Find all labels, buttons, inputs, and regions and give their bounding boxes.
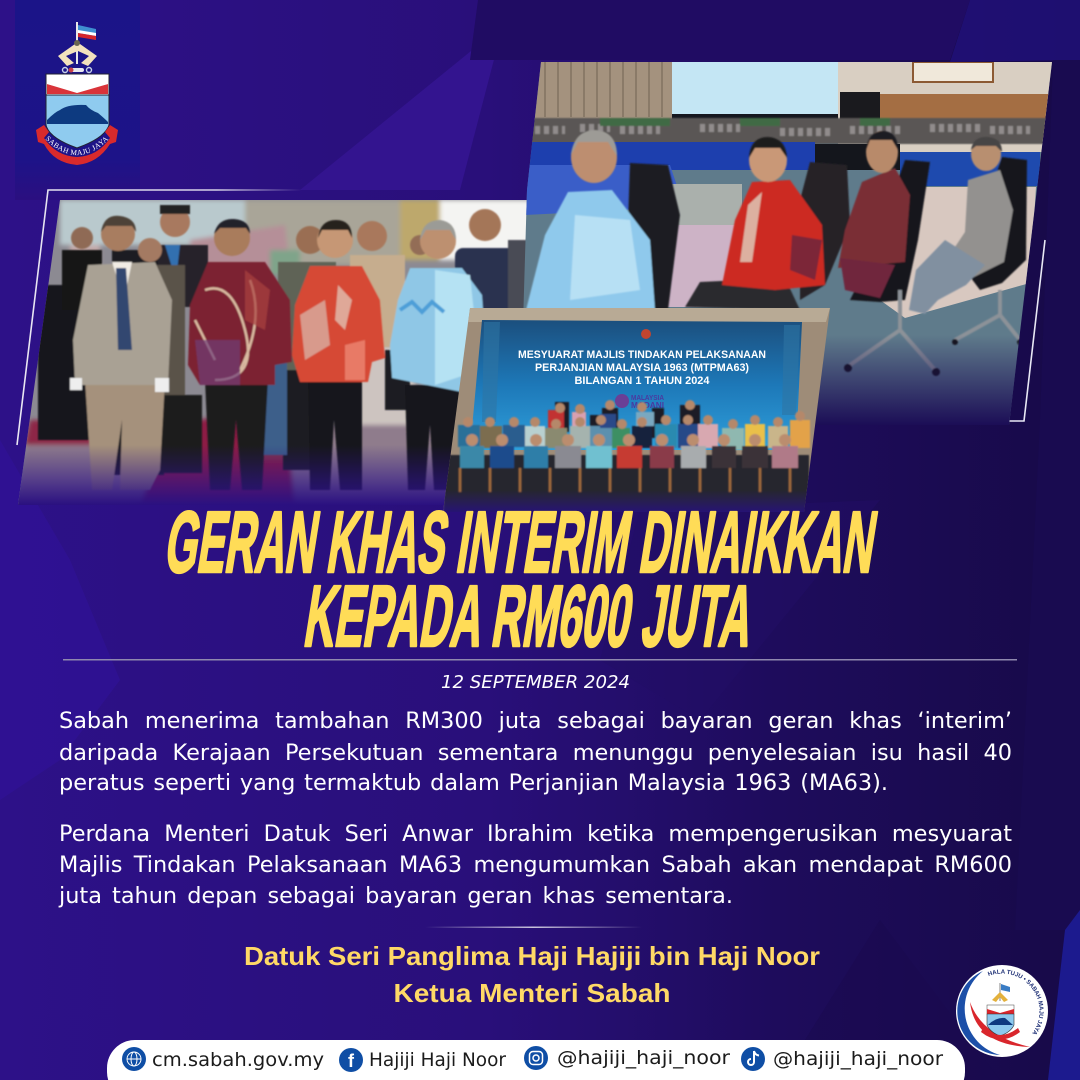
man in grey suit, seated [909,137,1027,314]
instagram: @hajiji_haji_noor [557,1047,730,1069]
banner heading [518,350,766,384]
paragraph 1 [59,708,1012,796]
photo: group photo with banner [440,306,840,516]
paragraph 2: Perdana Menteri Datuk Seri Anwar Ibrahim ketika mempengerusikan mesyuarat [59,821,1012,847]
paragraph 2 [58,821,1012,909]
paragraph 1: Sabah menerima tambahan RM300 juta sebagai bayaran geran khas ‘interim’ [59,708,1012,734]
signatory name and title: Ketua Menteri Sabah [394,978,670,1008]
Malaysia Madani mark: MALAYSIA [631,395,664,402]
social media bar [107,1040,965,1080]
paragraph 1: daripada Kerajaan Persekutuan sementara menunggu penyelesaian isu hasil 40 [59,740,1012,766]
round badge logo [956,965,1048,1057]
frame lines around photos [17,190,1045,445]
Malaysia Madani mark [615,394,664,408]
title divider [63,659,1017,660]
group of delegates [444,400,810,515]
man in red, seated [685,137,850,310]
man in grey suit [70,216,172,490]
crest logo: Sabah [36,22,118,165]
paragraph 1: peratus seperti yang termaktub dalam Perjanjian Malaysia 1963 (MA63). [59,770,888,796]
paragraph 2: Majlis Tindakan Pelaksanaan MA63 mengumumkan Sabah akan mendapat RM600 [59,852,1012,878]
tiktok: @hajiji_haji_noor [773,1048,943,1070]
facebook: Hajiji Haji Noor [369,1049,506,1071]
man in batik, seated [838,131,930,302]
man in red batik [292,220,385,490]
crest logo: Sabah: SABAH MAJU JAYA [46,136,108,156]
website: cm.sabah.gov.my [152,1049,324,1071]
signatory name and title: Datuk Seri Panglima Haji Hajiji bin Haji Noor [244,941,820,971]
paragraph 2: juta tahun depan sebagai bayaran geran khas sementara. [59,883,733,909]
divider [425,926,642,928]
date: 12 SEPTEMBER 2024 [441,673,630,693]
man in light blue, seated [526,130,680,310]
man in light blue batik [390,220,488,490]
Malaysia Madani mark: MADANI [631,401,664,410]
banner heading: MESYUARAT MAJLIS TINDAKAN PELAKSANAAN [518,349,766,361]
background people [38,205,536,475]
man in maroon batik [188,219,292,490]
banner heading: PERJANJIAN MALAYSIA 1963 (MTPMA63) [535,362,749,374]
photo: meeting hall [500,62,1060,432]
banner heading: BILANGAN 1 TAHUN 2024 [574,375,710,387]
photo: leaders walking [0,200,540,505]
office chairs [850,290,1020,370]
facebook: f [348,1051,355,1071]
signatory name and title [244,941,820,1008]
round badge logo: HALA TUJU • SABAH MAJU JAYA [988,969,1044,1034]
title [160,493,883,665]
